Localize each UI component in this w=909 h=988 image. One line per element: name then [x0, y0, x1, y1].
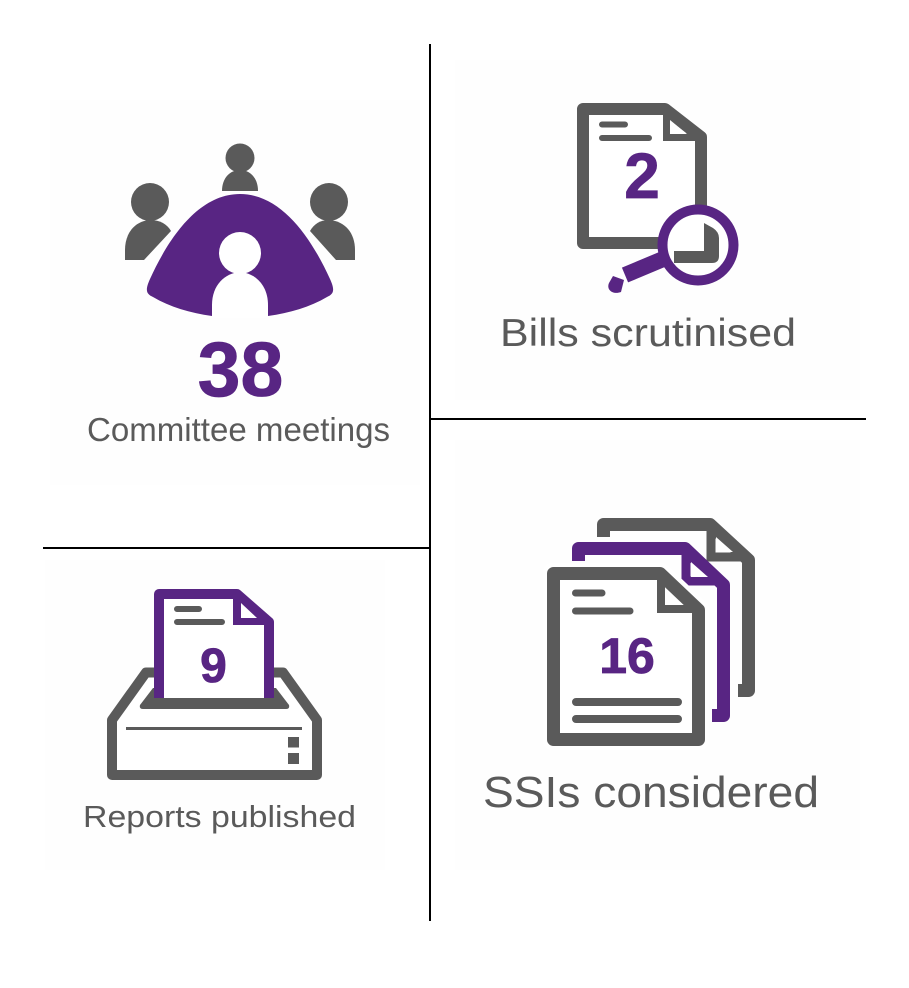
label: bills scrutinised: Bills scrutinised [500, 312, 796, 355]
label: reports published: Reports published [83, 799, 356, 834]
number: 2: 2 [624, 140, 660, 212]
number: 16: 16 [599, 628, 655, 684]
label: committee meetings: Committee meetings [87, 411, 390, 448]
icon: people around a table [125, 144, 355, 318]
icon: report in a printer tray [112, 592, 317, 775]
label: SSIs considered: SSIs considered [483, 768, 819, 817]
icon: stack of documents [554, 522, 748, 740]
panel: reports published [83, 592, 356, 834]
panel: bills scrutinised [500, 106, 796, 355]
number: 9: 9 [200, 640, 227, 693]
icon: document with magnifying glass [583, 106, 734, 293]
number: 38: 38 [198, 327, 283, 413]
panel: SSIs considered [483, 522, 819, 817]
panel: committee meetings [87, 144, 390, 448]
